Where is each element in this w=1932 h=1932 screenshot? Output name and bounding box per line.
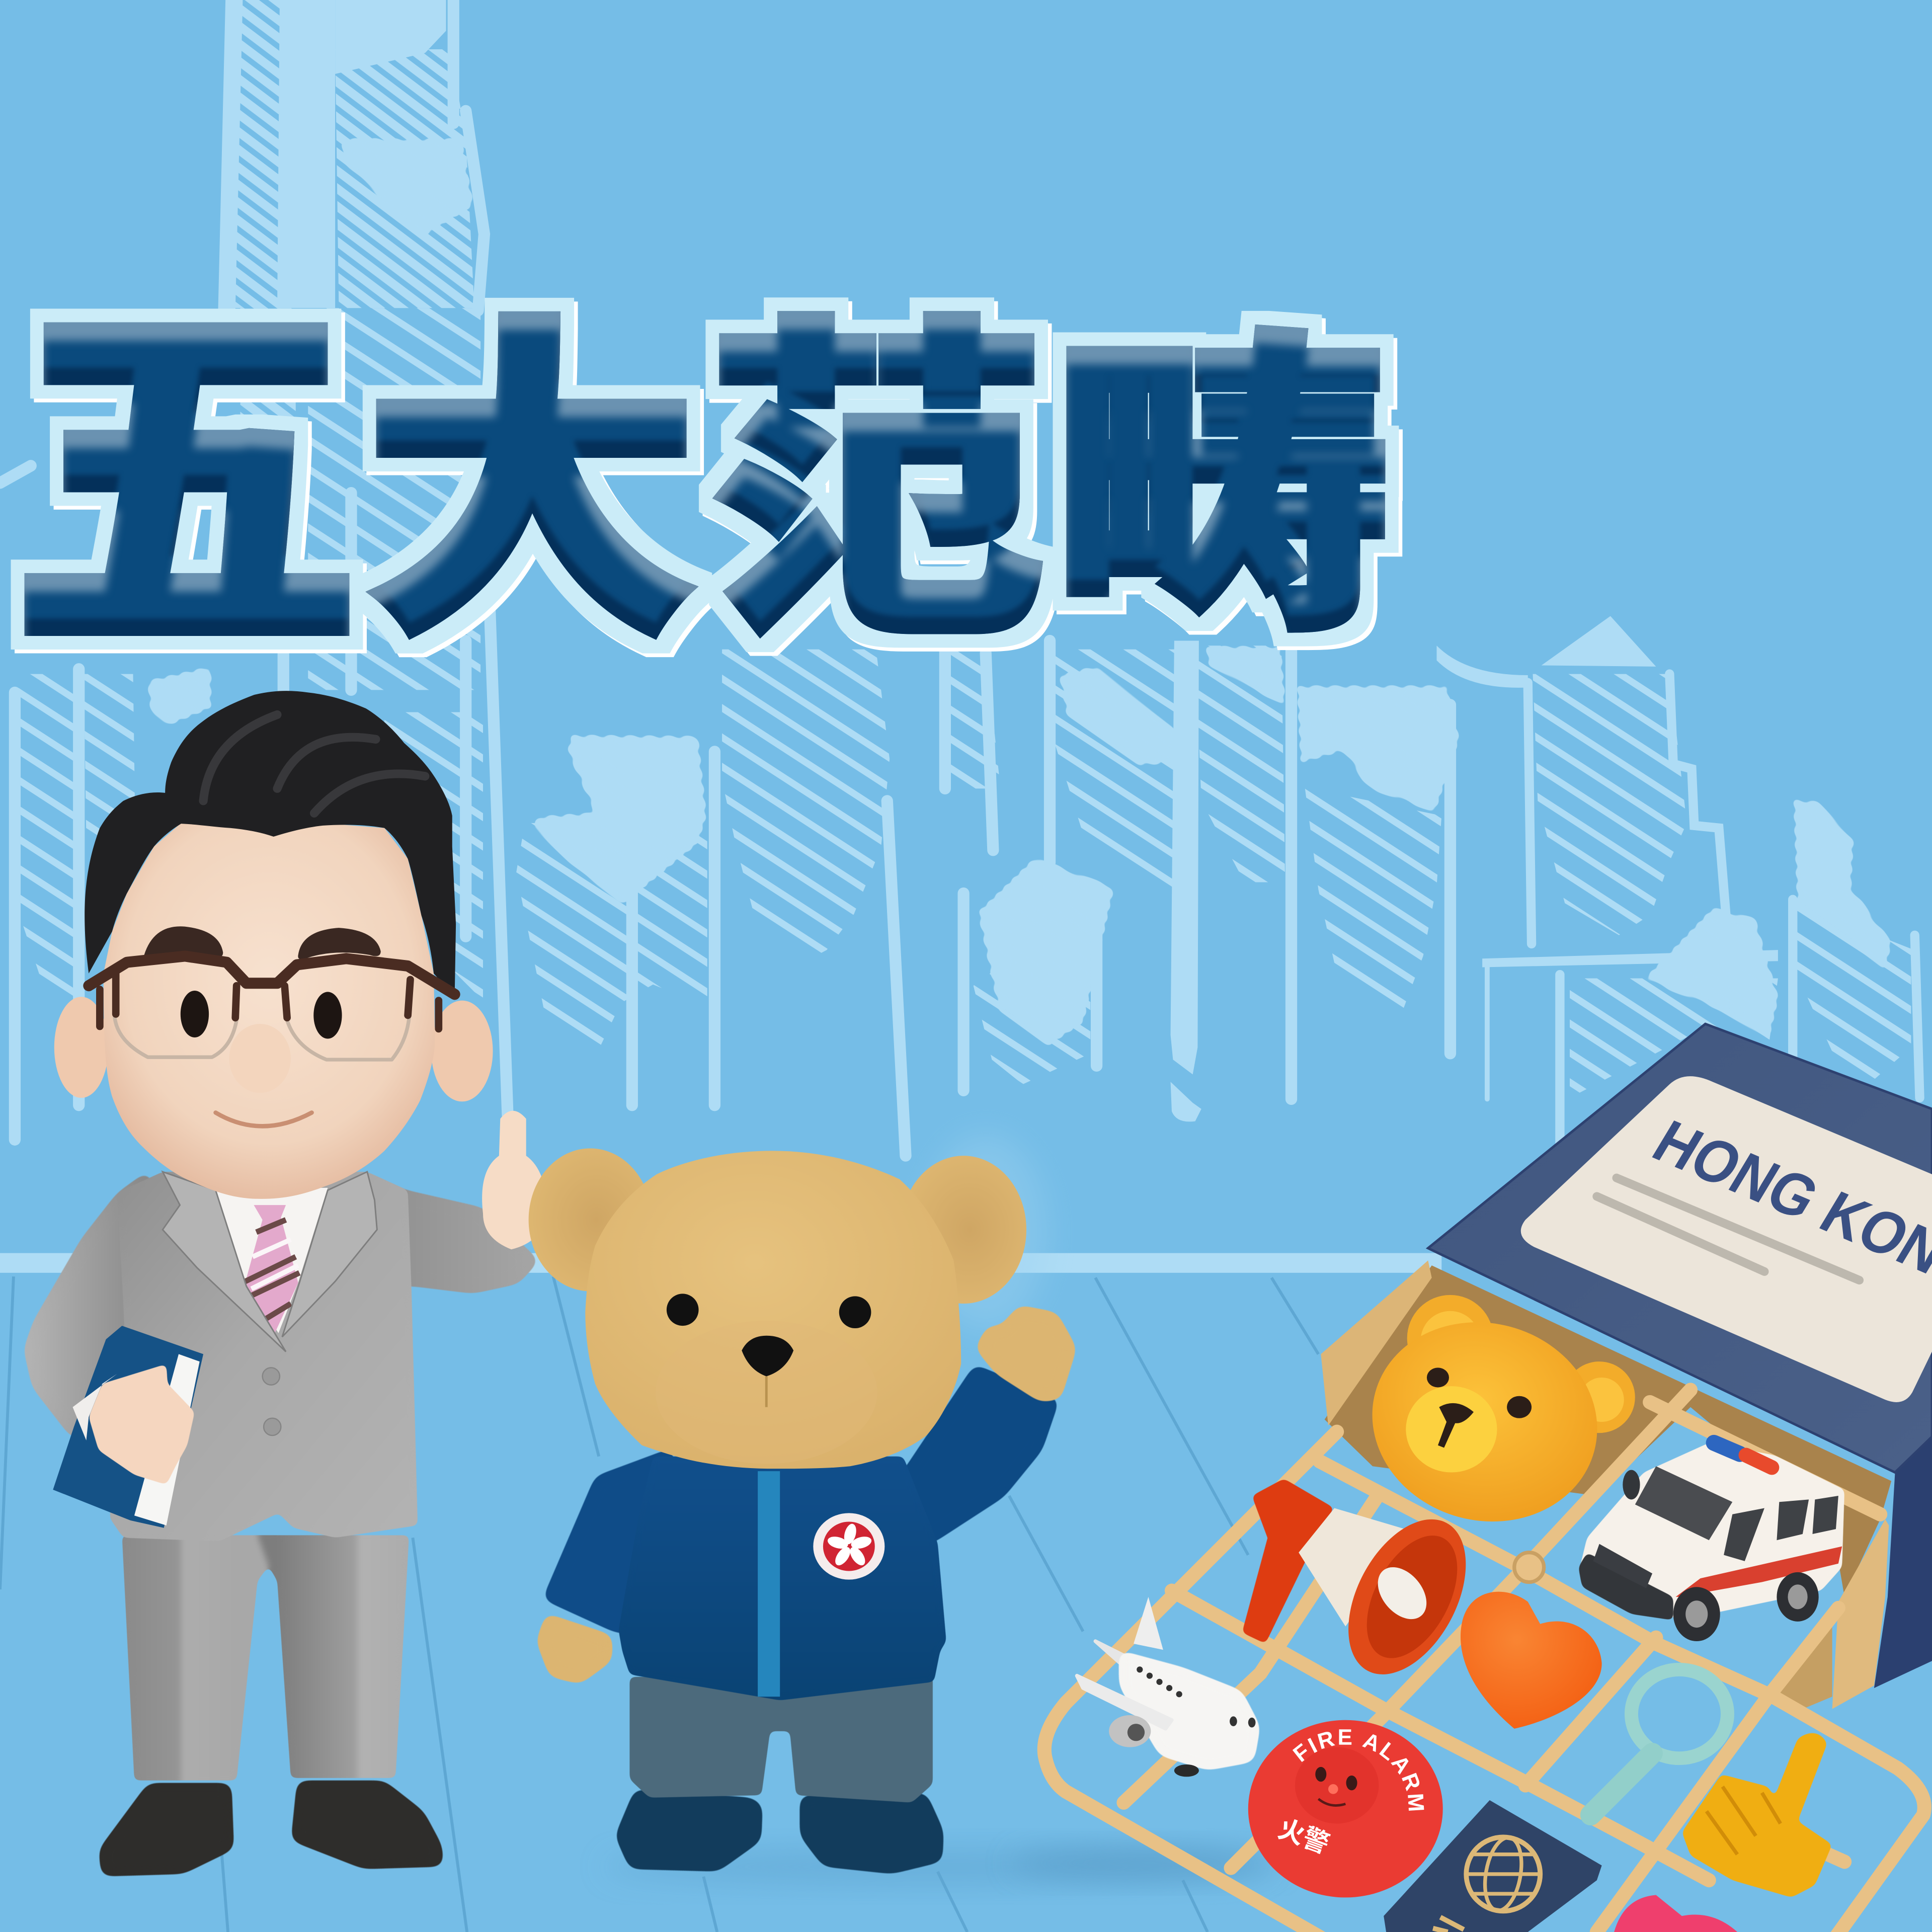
toy thumbs up bbox=[1682, 1733, 1832, 1897]
bear ears bbox=[529, 1148, 1026, 1304]
skyline hatching bbox=[19, 308, 1911, 1098]
floor planks bbox=[0, 1276, 1318, 1932]
skyline scribble blobs bbox=[146, 138, 1893, 1048]
man hair highlights bbox=[203, 714, 425, 813]
toy magnifier bbox=[1591, 1669, 1727, 1815]
toy fire alarm: 火警 bbox=[1274, 1808, 1335, 1861]
man face bbox=[104, 820, 435, 1199]
bear muzzle bbox=[656, 1321, 877, 1464]
title: 大 bbox=[362, 298, 700, 675]
title: 五 bbox=[11, 276, 362, 692]
man lapels bbox=[163, 1172, 377, 1352]
bear left arm bbox=[542, 1448, 690, 1639]
title: 畴 bbox=[1051, 313, 1391, 666]
bear emblem bbox=[813, 1513, 884, 1580]
man shoes bbox=[99, 1781, 444, 1877]
man eyebrows bbox=[144, 926, 381, 959]
man book bbox=[53, 1326, 203, 1528]
toy megaphone bbox=[1242, 1479, 1490, 1694]
bear paws bbox=[536, 1305, 1077, 1684]
man left arm bbox=[24, 1171, 173, 1440]
bear head bbox=[585, 1151, 961, 1469]
man mouth bbox=[216, 1112, 312, 1126]
grid floor shadow bbox=[1010, 1848, 1281, 1878]
sprue frame bbox=[1044, 1390, 1924, 1932]
man hand bbox=[89, 1364, 195, 1485]
man thumbs-up hand bbox=[482, 1111, 547, 1249]
toy bear head bbox=[1350, 1295, 1635, 1547]
drawer left panel bbox=[1321, 1260, 1432, 1425]
tower solid column and roofs bbox=[277, 0, 1778, 967]
man raised arm bbox=[370, 1177, 540, 1294]
city skyline sketch bbox=[0, 0, 1920, 1156]
bear trousers bbox=[629, 1674, 933, 1803]
man eyes bbox=[181, 991, 342, 1038]
man hair bbox=[85, 691, 456, 997]
skyline vertical strokes bbox=[0, 0, 1920, 1156]
horizon band bbox=[0, 1253, 1441, 1273]
toy plane bbox=[1077, 1597, 1260, 1777]
tower connecting shape bbox=[1171, 640, 1201, 1121]
character: man in suit bbox=[24, 691, 547, 1877]
bear floor shadow bbox=[604, 1849, 1269, 1884]
toy passport bbox=[1384, 1800, 1602, 1932]
box label lines bbox=[1597, 1178, 1860, 1280]
character: teddy bear mascot bbox=[529, 1134, 1269, 1884]
toy fire alarm: FIRE ALARM bbox=[1293, 1729, 1424, 1811]
bear shoes bbox=[615, 1789, 944, 1874]
bear nose bbox=[742, 1336, 793, 1377]
bear glow bbox=[924, 1134, 1048, 1331]
box right side bbox=[1874, 1437, 1932, 1688]
man nose bbox=[229, 1024, 291, 1093]
title bbox=[11, 276, 1391, 692]
toy fire alarm bbox=[1248, 1720, 1443, 1898]
bear zip bbox=[758, 1471, 780, 1697]
toy box bbox=[1037, 1022, 1932, 1932]
drawer right panel bbox=[1832, 1519, 1889, 1709]
man shirt bbox=[208, 1188, 328, 1333]
sprue hub bbox=[1514, 1553, 1544, 1582]
man jacket buttons bbox=[263, 1367, 281, 1435]
title: 范 bbox=[707, 298, 1048, 675]
drawer interior bbox=[1325, 1265, 1891, 1597]
box label bbox=[1521, 1076, 1932, 1402]
bear jacket bbox=[618, 1457, 946, 1701]
tower dense hatching bbox=[234, 0, 474, 493]
bear eyes bbox=[667, 1294, 871, 1328]
man jacket bbox=[110, 1172, 418, 1542]
man trousers bbox=[122, 1535, 409, 1781]
toy heart bbox=[1461, 1592, 1602, 1729]
man glasses bbox=[89, 956, 455, 1060]
drawer inner shade bbox=[1768, 1620, 1832, 1709]
toy ambulance bbox=[1578, 1443, 1844, 1641]
toy pink heart bbox=[1614, 1895, 1737, 1932]
man tie bbox=[245, 1205, 299, 1333]
bear right arm bbox=[862, 1364, 1060, 1565]
man ears bbox=[54, 997, 493, 1101]
man cuff bbox=[72, 1374, 117, 1440]
box lid bbox=[1428, 1024, 1932, 1473]
